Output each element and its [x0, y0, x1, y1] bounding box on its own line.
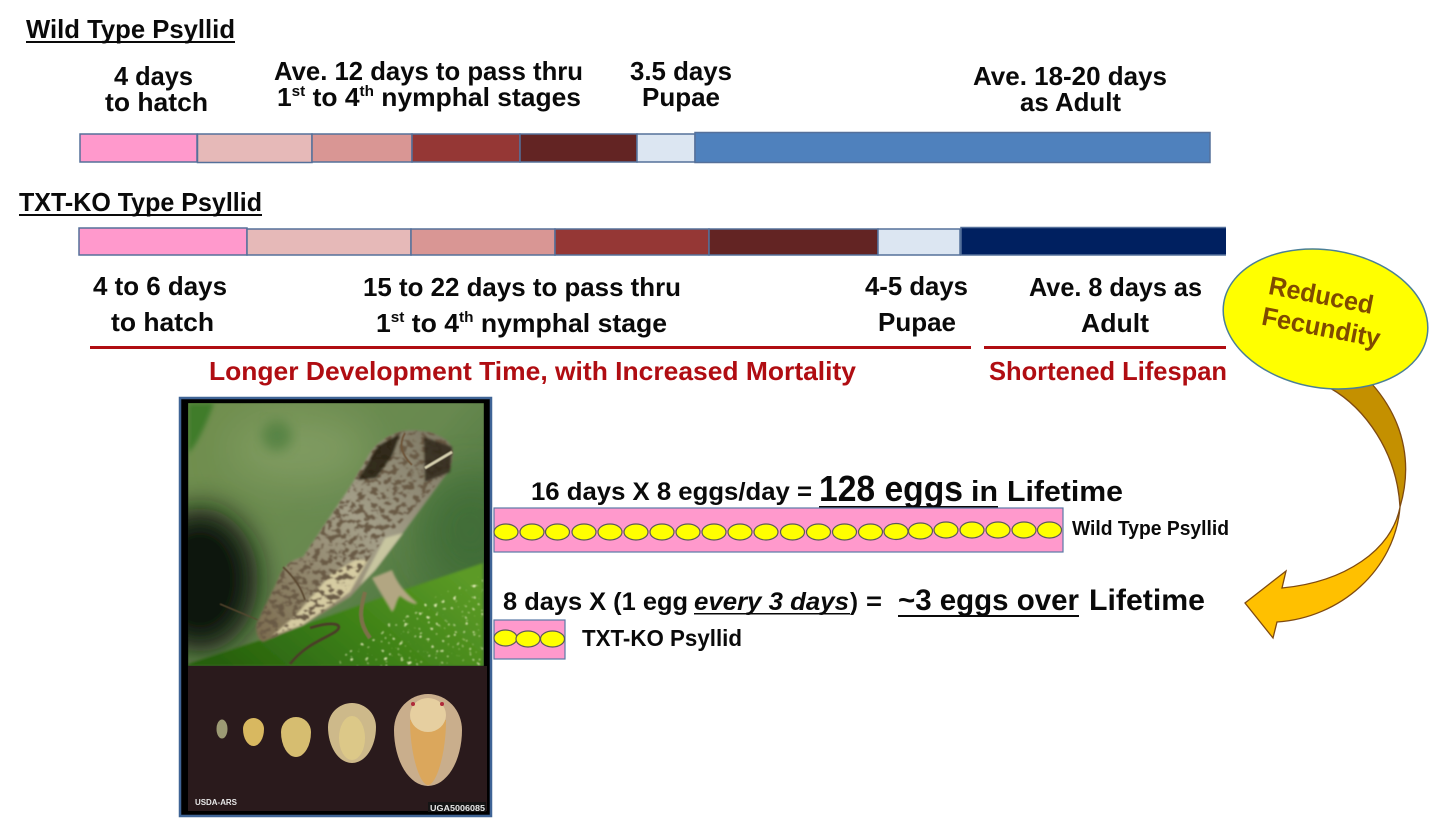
equation: txt-ko eggs: ) [850, 588, 858, 616]
label: adult duration: as Adult [1020, 87, 1121, 117]
photo id: uga5006085: UGA5006085 [430, 804, 486, 813]
photo panel: adult psyllid and nymphs [178, 396, 492, 818]
equation: txt-ko eggs [503, 584, 1205, 617]
label: nymphal stage duration: st [292, 83, 305, 100]
callout: reduced fecundity: Reduced [1266, 270, 1376, 320]
equation: wild type eggs: in [971, 476, 998, 508]
heading: txt-ko type psyllid: TXT-KO Type Psyllid [19, 187, 262, 217]
label: pupae duration: 4-5 days [865, 271, 968, 301]
callout: shortened lifespan: Shortened Lifespan [989, 356, 1227, 386]
arrow upper section [1330, 384, 1406, 507]
label: egg stage duration: to hatch [105, 87, 208, 117]
callout: reduced fecundity [1213, 235, 1429, 403]
heading: wild type psyllid: Wild Type Psyllid [26, 14, 235, 44]
label: nymphal stage duration: 1 [376, 308, 390, 338]
label: egg stage duration: 4 days [114, 61, 193, 91]
label: nymphal stage duration [363, 272, 681, 338]
bracket line: development time [90, 346, 971, 349]
label: nymphal stage duration: to 4 [305, 82, 360, 112]
egg bar: txt-ko [494, 620, 565, 659]
label: nymphal stage duration: th [459, 309, 474, 326]
label: pupae duration: 3.5 days [630, 56, 732, 86]
callout: longer development time: Longer Development Time, with Increased Mortality [209, 356, 857, 386]
txt-ko stage labels [93, 271, 1202, 338]
equation: txt-ko eggs: every 3 days [694, 588, 849, 616]
equation: txt-ko eggs: ~3 eggs over [898, 584, 1079, 617]
timeline bar: txt-ko [79, 228, 1226, 255]
label: adult duration: Adult [1081, 308, 1149, 338]
label: egg stage duration: to hatch [111, 307, 214, 337]
equation: txt-ko eggs: = [866, 588, 882, 616]
label: wild type psyllid eggs: Wild Type Psyllid [1072, 518, 1229, 540]
photo id: uga5006085 [428, 802, 486, 813]
label: adult duration: Ave. 18-20 days [973, 61, 1167, 91]
equation: wild type eggs [531, 468, 1123, 509]
label: nymphal stage duration: th [360, 83, 374, 100]
timeline bar: wild type [80, 132, 1210, 162]
label: adult duration [973, 61, 1167, 117]
label: pupae duration [630, 56, 732, 112]
equation: txt-ko eggs: Lifetime [1089, 584, 1205, 617]
bracket line: lifespan [984, 346, 1226, 349]
label: pupae duration [865, 271, 968, 337]
photo: nymph stages [188, 666, 487, 811]
label: egg stage duration [105, 61, 208, 117]
label: nymphal stage duration: st [391, 309, 404, 326]
curved arrow: fecundity to eggs [1245, 384, 1406, 638]
label: nymphal stage duration: 15 to 22 days to pass thru [363, 272, 681, 302]
label: egg stage duration [93, 271, 227, 337]
label: nymphal stage duration: nymphal stages [374, 82, 581, 112]
label: pupae duration: Pupae [878, 307, 956, 337]
equation: wild type eggs: 128 eggs [819, 468, 963, 509]
egg bar: wild type [494, 508, 1063, 552]
wild type stage labels [105, 56, 1167, 117]
equation: txt-ko eggs: 8 days X (1 egg [503, 588, 688, 616]
label: adult duration [1029, 272, 1202, 338]
label: pupae duration: Pupae [642, 82, 720, 112]
eggs: wild type row [494, 522, 1062, 540]
arrow lower section and head [1245, 507, 1400, 638]
label: nymphal stage duration: Ave. 12 days to pass thru [274, 56, 583, 86]
photo credit: usda-ars: USDA-ARS [195, 798, 238, 807]
label: adult duration: Ave. 8 days as [1029, 272, 1202, 302]
label: nymphal stage duration: nymphal stage [474, 308, 667, 338]
label: nymphal stage duration: 1 [277, 82, 291, 112]
eggs: txt-ko row [494, 630, 564, 647]
label: nymphal stage duration [274, 56, 583, 112]
callout: reduced fecundity: Fecundity [1259, 301, 1383, 353]
label: txt-ko psyllid eggs: TXT-KO Psyllid [582, 625, 742, 651]
equation: wild type eggs: Lifetime [1007, 476, 1123, 508]
label: nymphal stage duration: to 4 [404, 308, 460, 338]
equation: wild type eggs: 16 days X 8 eggs/day = [531, 478, 812, 506]
label: egg stage duration: 4 to 6 days [93, 271, 227, 301]
photo: adult psyllid on leaf [188, 403, 484, 666]
